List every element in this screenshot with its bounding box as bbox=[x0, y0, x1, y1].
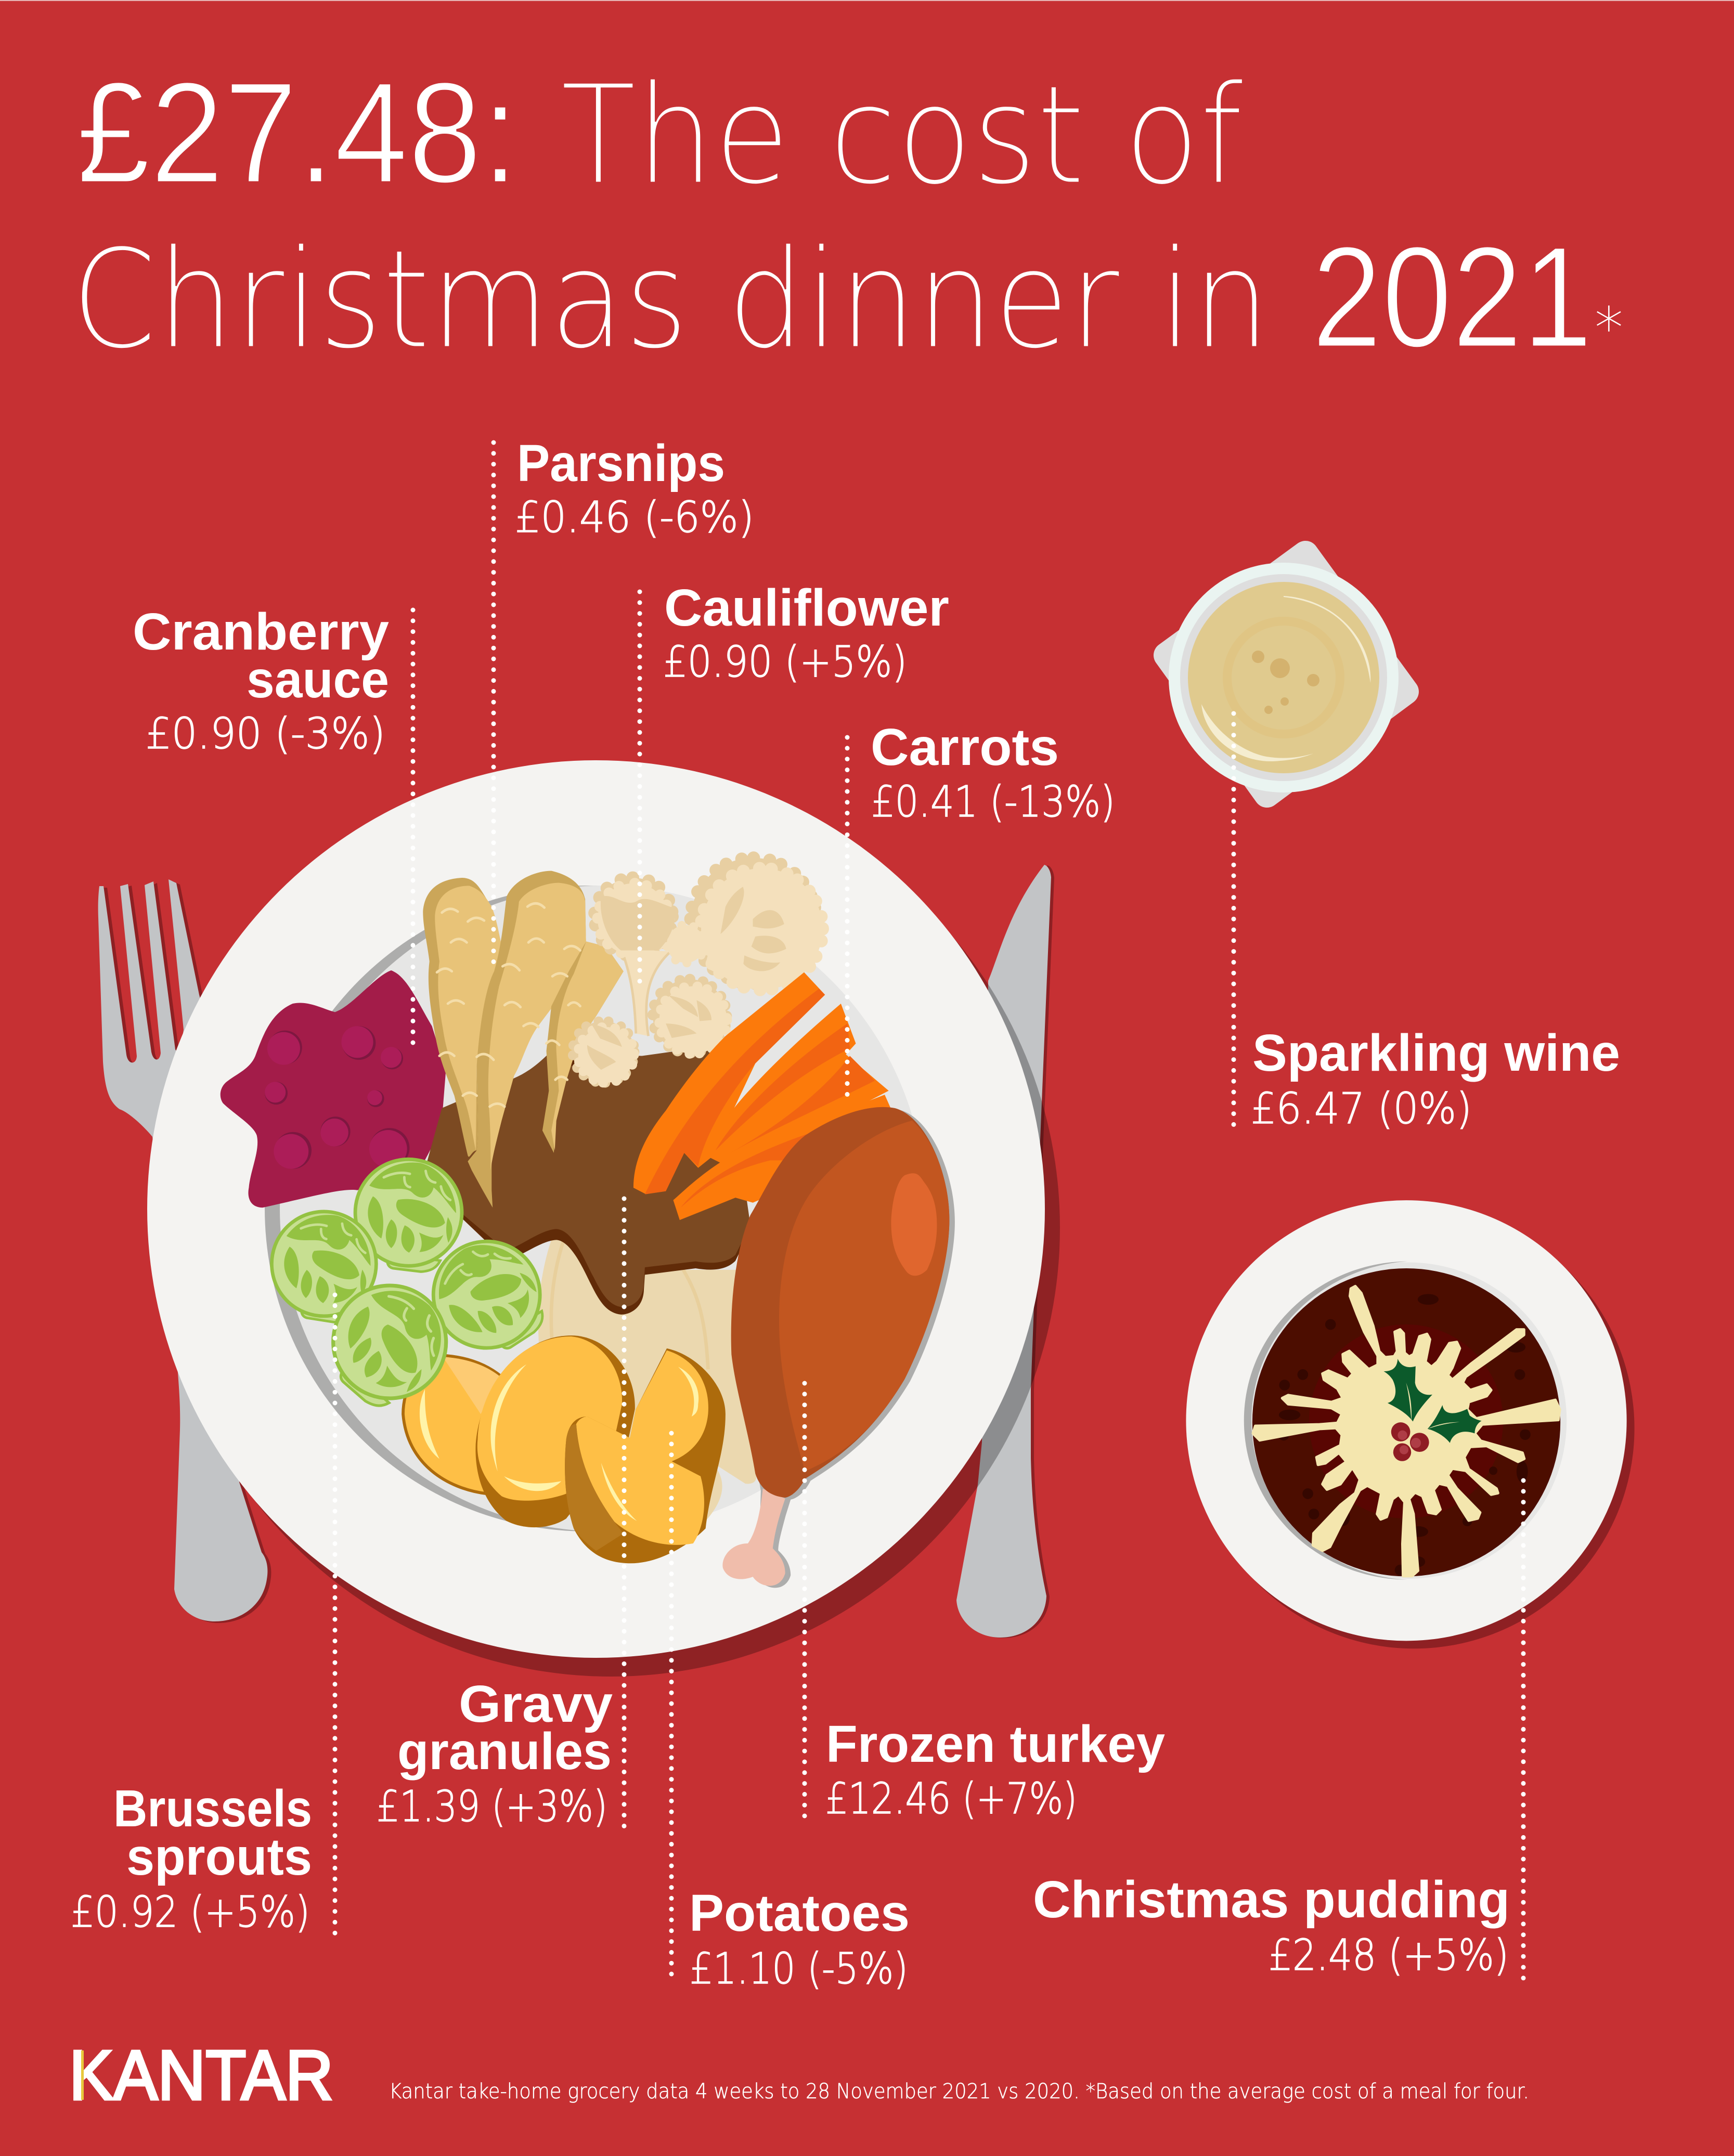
label: sparkling wine: £6.47 (0%) bbox=[1251, 1084, 1472, 1134]
title line 2: * bbox=[1595, 295, 1623, 361]
label: cranberry sauce bbox=[133, 603, 389, 759]
food: turkey leg bbox=[722, 1107, 955, 1588]
sprout left bbox=[263, 1203, 384, 1328]
label: carrots bbox=[871, 718, 1115, 827]
label: brussels sprouts bbox=[71, 1780, 312, 1937]
title line 1: The cost of bbox=[561, 56, 1244, 215]
icon: fork bbox=[98, 879, 271, 1623]
title line 1 bbox=[76, 51, 1244, 215]
label: cauliflower bbox=[663, 579, 949, 687]
label: sparkling wine bbox=[1251, 1024, 1620, 1134]
leader line: brussels sprouts bbox=[333, 1295, 337, 1936]
label: carrots: Carrots bbox=[871, 718, 1059, 776]
pudding plate bbox=[1186, 1200, 1635, 1648]
holly leaves bbox=[1383, 1359, 1482, 1443]
food: cauliflower bbox=[573, 858, 822, 1083]
label: gravy granules bbox=[377, 1675, 613, 1832]
leader line: carrots bbox=[845, 737, 850, 1096]
label: gravy granules: £1.39 (+3%) bbox=[377, 1782, 607, 1832]
label: cranberry sauce: sauce bbox=[247, 651, 389, 709]
label: sparkling wine: Sparkling wine bbox=[1252, 1024, 1620, 1082]
food: potatoes bbox=[403, 1335, 726, 1563]
leader line: potatoes bbox=[669, 1433, 674, 1978]
label: christmas pudding: Christmas pudding bbox=[1033, 1871, 1510, 1929]
label: parsnips: £0.46 (-6%) bbox=[515, 493, 754, 542]
food: carrots bbox=[633, 972, 890, 1220]
food: roast stuffing and pale vegetables bbox=[538, 1235, 756, 1521]
label: christmas pudding: £2.48 (+5%) bbox=[1269, 1931, 1509, 1980]
leader line: gravy granules bbox=[622, 1199, 626, 1829]
label: frozen turkey bbox=[825, 1715, 1165, 1824]
christmas pudding plate bbox=[1186, 1200, 1635, 1648]
label: cauliflower: Cauliflower bbox=[664, 579, 949, 637]
sprout bottom bbox=[307, 1262, 469, 1425]
custard splat bbox=[1253, 1286, 1560, 1576]
label: cauliflower: £0.90 (+5%) bbox=[663, 638, 907, 687]
turkey bone bbox=[722, 1489, 785, 1586]
kantar logo: KANTAR bbox=[69, 2036, 333, 2114]
footer source note: Kantar take-home grocery data 4 weeks to 28 November 2021 vs 2020. *Based on the average cost of a meal for four. bbox=[389, 2080, 1529, 2103]
icon: knife bbox=[956, 865, 1054, 1638]
main plate bbox=[147, 760, 1060, 1677]
label: potatoes: Potatoes bbox=[689, 1884, 910, 1942]
label: parsnips bbox=[515, 434, 754, 542]
pudding bbox=[1252, 1268, 1560, 1576]
food: brussels sprouts bbox=[263, 1152, 562, 1425]
label: carrots: £0.41 (-13%) bbox=[871, 777, 1115, 827]
sprout top bbox=[348, 1152, 469, 1277]
label: brussels sprouts: £0.92 (+5%) bbox=[71, 1888, 310, 1937]
title line 2: Christmas dinner in bbox=[71, 220, 1270, 380]
leader line: christmas pudding bbox=[1521, 1480, 1526, 1980]
title line 1: £27.48: bbox=[76, 51, 519, 213]
label: gravy granules: Gravy bbox=[459, 1675, 613, 1733]
food: gravy bbox=[422, 1047, 750, 1315]
leader line: parsnips bbox=[491, 443, 496, 964]
label: brussels sprouts: sprouts bbox=[126, 1828, 312, 1886]
leader line: cauliflower bbox=[638, 592, 642, 981]
label: christmas pudding bbox=[1033, 1871, 1510, 1980]
sprout right bbox=[413, 1221, 562, 1371]
label: cranberry sauce: Cranberry bbox=[133, 603, 389, 661]
title line 2: 2021 bbox=[1312, 216, 1593, 378]
label: parsnips: Parsnips bbox=[517, 434, 725, 492]
label: frozen turkey: £12.46 (+7%) bbox=[825, 1774, 1077, 1824]
label: brussels sprouts: Brussels bbox=[113, 1780, 312, 1838]
holly berries bbox=[1391, 1422, 1429, 1461]
label: potatoes bbox=[689, 1884, 910, 1994]
leader line: frozen turkey bbox=[802, 1383, 807, 1819]
label: frozen turkey: Frozen turkey bbox=[826, 1715, 1165, 1773]
label: potatoes: £1.10 (-5%) bbox=[690, 1944, 908, 1994]
label: cranberry sauce: £0.90 (-3%) bbox=[146, 709, 385, 759]
label: gravy granules: granules bbox=[397, 1722, 612, 1781]
sparkling wine glass bbox=[1167, 554, 1406, 795]
food: cranberry sauce bbox=[221, 970, 446, 1207]
food on plate bbox=[221, 858, 955, 1588]
leader line: cranberry sauce bbox=[411, 610, 415, 1046]
leader line: sparkling wine bbox=[1232, 713, 1236, 1127]
title bbox=[71, 51, 1623, 380]
food: parsnips bbox=[423, 871, 624, 1207]
